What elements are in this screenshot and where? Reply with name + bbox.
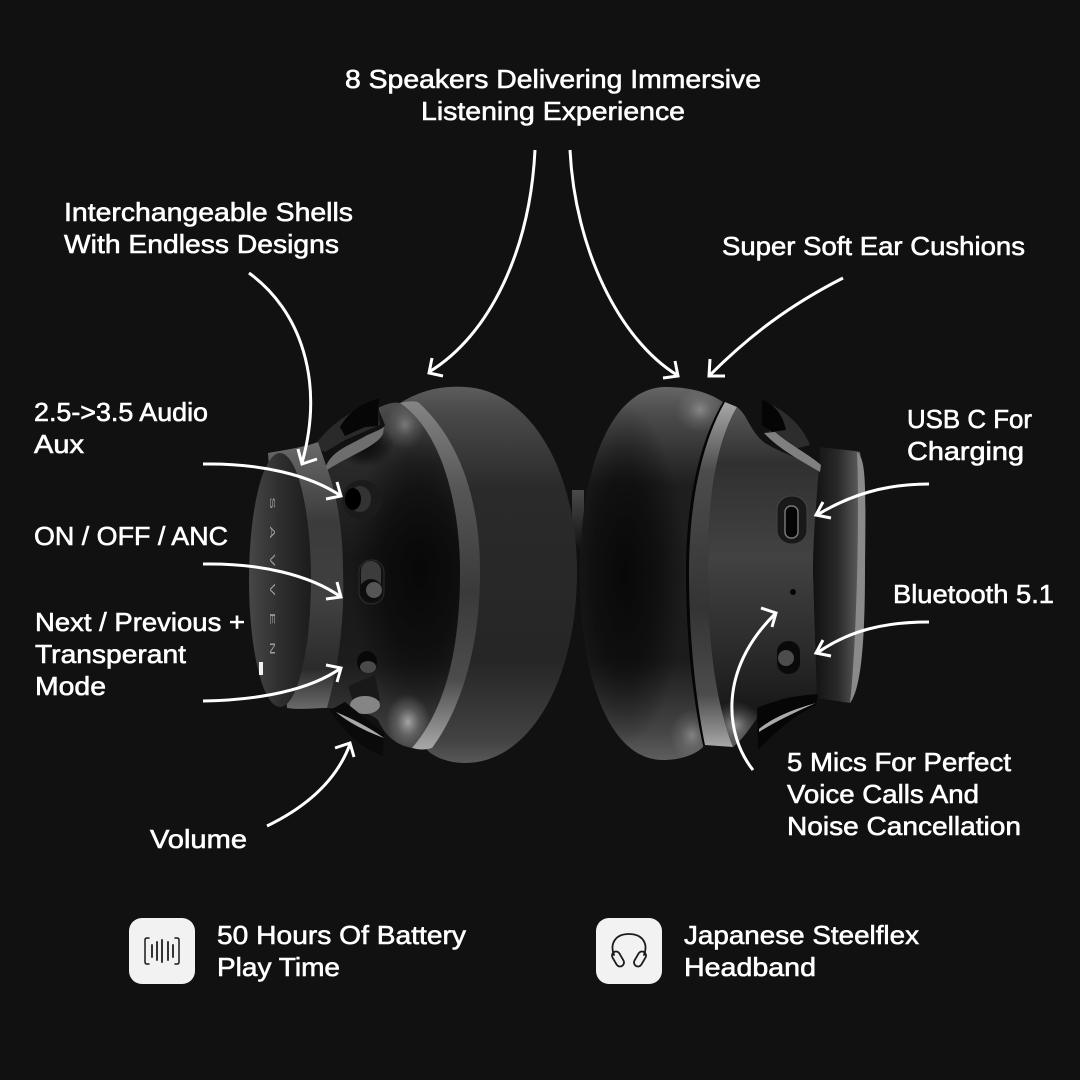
right lower fin <box>757 694 818 750</box>
label: ear cushions: Super Soft Ear Cushions <box>722 231 1025 261</box>
label: mics: Noise Cancellation <box>787 811 1021 841</box>
label: interchangeable shells: With Endless Designs <box>64 229 339 259</box>
heading: speakers <box>345 64 761 126</box>
battery text: 50 Hours Of Battery <box>217 920 466 950</box>
right grey ring <box>689 402 737 747</box>
arrow: usb <box>816 484 929 518</box>
right rear fin <box>762 400 810 450</box>
arrow: aux <box>203 464 341 499</box>
heading: speakers: Listening Experience <box>421 96 685 126</box>
label: volume: Volume <box>150 824 247 854</box>
left shell face <box>249 453 311 707</box>
arrow: speakers left <box>429 150 535 376</box>
label: usb c <box>907 404 1032 466</box>
label: mics: 5 Mics For Perfect <box>787 747 1012 777</box>
left top fin blade <box>340 398 379 436</box>
icon: battery bars <box>145 938 179 964</box>
left upper arm <box>326 427 384 470</box>
arrow: on off <box>203 564 341 599</box>
arrow: shells <box>249 273 317 464</box>
left top fin <box>314 398 380 452</box>
left cushion <box>400 386 577 763</box>
left lower fin <box>330 702 384 756</box>
battery text: Play Time <box>217 952 340 982</box>
heading: speakers: 8 Speakers Delivering Immersive <box>345 64 761 94</box>
headphones illustration <box>249 380 865 770</box>
label: audio aux <box>34 397 208 459</box>
label: usb c: USB C For <box>907 404 1032 434</box>
feature: headband <box>596 918 919 984</box>
right body <box>708 407 818 747</box>
right upper arm <box>764 432 821 472</box>
power slider <box>359 560 384 604</box>
left body <box>327 402 460 748</box>
label: audio aux: Aux <box>34 429 84 459</box>
label: mics: Voice Calls And <box>787 779 979 809</box>
label: next previous: Next / Previous + <box>35 607 245 637</box>
left ear cup <box>249 380 585 770</box>
right shell edge <box>850 452 865 703</box>
arrow: bluetooth <box>816 622 929 656</box>
volume buttons <box>348 651 380 714</box>
arrow: next previous <box>203 665 341 701</box>
arrow: speakers right <box>570 150 678 378</box>
feature: battery <box>129 918 466 984</box>
headband icon tile <box>596 918 662 984</box>
label: next previous: Transperant <box>35 639 187 669</box>
label: bluetooth: Bluetooth 5.1 <box>893 579 1054 609</box>
right ear cup <box>565 380 865 770</box>
right top fin blade <box>762 400 786 432</box>
headband text <box>684 920 919 982</box>
label: next previous: Mode <box>35 671 106 701</box>
right cushion <box>582 387 723 760</box>
battery text <box>217 920 466 982</box>
bluetooth button <box>777 641 800 674</box>
mic hole <box>790 589 796 595</box>
right dark gap <box>686 402 727 745</box>
usb c port <box>777 496 807 544</box>
label: audio aux: 2.5->3.5 Audio <box>34 397 208 427</box>
label: next previous <box>35 607 245 701</box>
arrow: volume <box>267 743 354 826</box>
arrow: ear cushions <box>709 278 843 376</box>
label: interchangeable shells <box>64 197 353 259</box>
headband stub <box>572 490 584 550</box>
shell white mark <box>259 662 263 675</box>
label: on off anc: ON / OFF / ANC <box>34 521 228 551</box>
battery icon tile <box>129 918 195 984</box>
arrow: mics <box>732 608 776 770</box>
aux port <box>342 480 382 520</box>
label: usb c: Charging <box>907 436 1024 466</box>
icon: headphones <box>611 934 647 968</box>
label: interchangeable shells: Interchangeable Shells <box>64 197 353 227</box>
label: mics <box>787 747 1021 841</box>
left grey ring <box>400 401 480 750</box>
headband text: Japanese Steelflex <box>684 920 919 950</box>
headband text: Headband <box>684 952 816 982</box>
shell logo: SAVVEN <box>268 497 277 655</box>
right shell band <box>813 447 864 703</box>
left shell band <box>268 442 343 709</box>
